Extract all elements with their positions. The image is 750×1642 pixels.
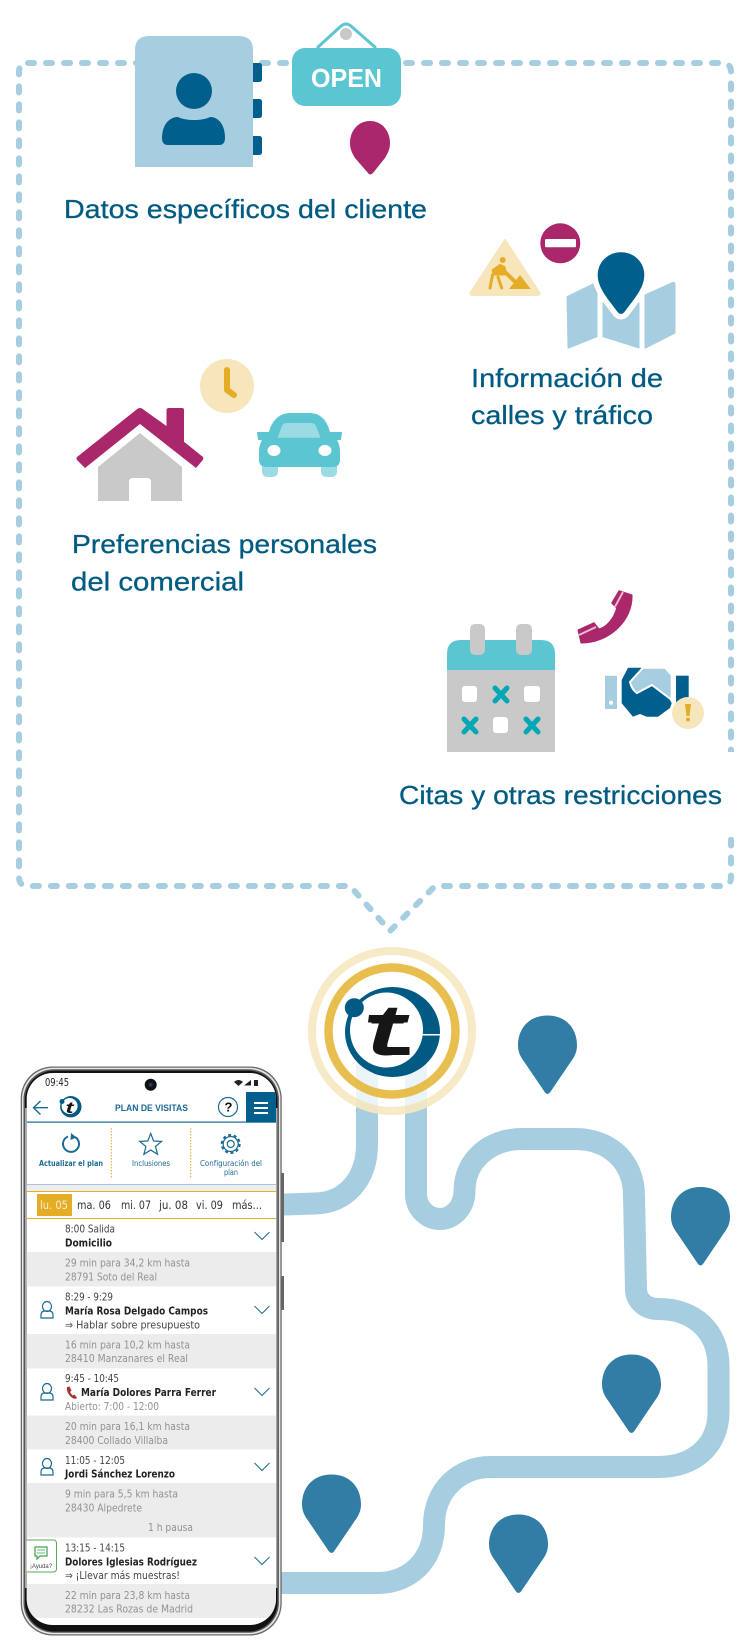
visit 2: 16 min para 10,2 km hasta bbox=[65, 1339, 190, 1351]
help badge bbox=[24, 1540, 56, 1572]
heading: street and traffic info: Información de bbox=[471, 363, 663, 393]
help badge: ¡Ayuda? bbox=[30, 1564, 53, 1570]
app header: PLAN DE VISITAS bbox=[115, 1103, 188, 1113]
central logo with rings bbox=[308, 947, 476, 1115]
visit 4: Jordi Sánchez Lorenzo bbox=[64, 1469, 175, 1481]
visit 4: 9 min para 5,5 km hasta bbox=[65, 1489, 178, 1501]
icon: house bbox=[76, 408, 203, 501]
phone bbox=[21, 1066, 284, 1636]
status bar bbox=[45, 1077, 258, 1091]
visit 2 bbox=[41, 1292, 270, 1365]
visit 1: home: 29 min para 34,2 km hasta bbox=[65, 1258, 190, 1270]
visit 2: ⇒ Hablar sobre presupuesto bbox=[65, 1320, 200, 1332]
visit 5: ⇒ ¡Llevar más muestras! bbox=[65, 1570, 180, 1582]
map pin 3 bbox=[602, 1354, 661, 1433]
grey travel bands bbox=[27, 1252, 277, 1618]
app header bbox=[27, 1092, 277, 1123]
day tabs: ma. 06 bbox=[77, 1198, 111, 1212]
visit 3: 20 min para 16,1 km hasta bbox=[65, 1421, 190, 1433]
visit 5: 22 min para 23,8 km hasta bbox=[65, 1590, 190, 1602]
icon: no entry sign bbox=[540, 223, 580, 263]
icon: address book bbox=[135, 36, 262, 167]
visit 1: home: 28791 Soto del Real bbox=[65, 1272, 157, 1284]
app header: ? bbox=[224, 1100, 232, 1114]
visit 1: home: Domicilio bbox=[65, 1238, 112, 1250]
visit 3 bbox=[41, 1373, 270, 1447]
icon: phone handset bbox=[578, 591, 632, 643]
day tabs: vi. 09 bbox=[196, 1198, 223, 1212]
day tabs: mi. 07 bbox=[121, 1198, 151, 1212]
visit 5: 28232 Las Rozas de Madrid bbox=[65, 1604, 193, 1616]
heading: personal preferences: del comercial bbox=[71, 566, 244, 596]
day tabs: ju. 08 bbox=[158, 1198, 188, 1212]
visit 2: María Rosa Delgado Campos bbox=[65, 1306, 208, 1318]
toolbar: Inclusiones bbox=[132, 1159, 170, 1168]
icon: calendar bbox=[447, 624, 555, 752]
map pin 4 bbox=[302, 1474, 361, 1553]
visit 2: 8:29 - 9:29 bbox=[65, 1292, 113, 1304]
heading: street and traffic info: calles y tráfico bbox=[471, 400, 653, 430]
icon: car bbox=[257, 413, 342, 477]
map pin 1 bbox=[518, 1016, 577, 1094]
heading: personal preferences bbox=[71, 529, 377, 596]
visit 4 bbox=[41, 1455, 270, 1534]
visit 5: 13:15 - 14:15 bbox=[65, 1542, 125, 1554]
heading: client data: Datos específicos del cliente bbox=[64, 194, 427, 224]
dashed callout frame bbox=[19, 63, 745, 931]
day tabs: lu. 05 bbox=[40, 1198, 68, 1212]
icon: open sign bbox=[292, 24, 401, 106]
toolbar: Actualizar el plan bbox=[39, 1159, 103, 1168]
visit 3: 28400 Collado Villalba bbox=[65, 1435, 168, 1447]
toolbar: plan bbox=[224, 1168, 238, 1177]
visit 3: Abierto: 7:00 - 12:00 bbox=[65, 1401, 159, 1413]
day tabs bbox=[27, 1185, 277, 1219]
toolbar bbox=[27, 1128, 277, 1185]
icon: magenta pin bbox=[350, 121, 390, 174]
day tabs: más... bbox=[232, 1198, 262, 1212]
central logo with rings: t bbox=[367, 991, 405, 1071]
visit 3: María Dolores Parra Ferrer bbox=[81, 1387, 217, 1399]
icon: roadworks triangle bbox=[470, 240, 540, 295]
heading: street and traffic info bbox=[471, 363, 663, 430]
heading: personal preferences: Preferencias personales bbox=[72, 529, 377, 559]
winding route bbox=[270, 1060, 718, 1583]
toolbar: Configuración del bbox=[200, 1159, 262, 1168]
icon: handshake with alert bbox=[605, 668, 704, 729]
visit 5 bbox=[65, 1542, 270, 1616]
visit 4: 28430 Alpedrete bbox=[65, 1503, 142, 1515]
map pin 2 bbox=[671, 1187, 730, 1266]
visit 3: 9:45 - 10:45 bbox=[65, 1373, 119, 1385]
icon: open sign: OPEN bbox=[311, 63, 382, 93]
map pin 5 bbox=[489, 1514, 548, 1593]
heading: appointments and restrictions: Citas y otras restricciones bbox=[399, 780, 722, 810]
visit 1: home: 8:00 Salida bbox=[65, 1224, 115, 1236]
route to phone bbox=[270, 1060, 367, 1205]
visit 5: Dolores Iglesias Rodríguez bbox=[65, 1556, 197, 1568]
icon: map with pin bbox=[567, 252, 675, 348]
visit 2: 28410 Manzanares el Real bbox=[65, 1353, 188, 1365]
visit 1: home bbox=[65, 1224, 270, 1284]
icon: clock bbox=[200, 359, 254, 413]
status bar: 09:45 bbox=[45, 1077, 69, 1089]
app header: t bbox=[66, 1100, 75, 1117]
visit 4: 1 h pausa bbox=[148, 1522, 193, 1534]
visit 4: 11:05 - 12:05 bbox=[65, 1455, 125, 1467]
